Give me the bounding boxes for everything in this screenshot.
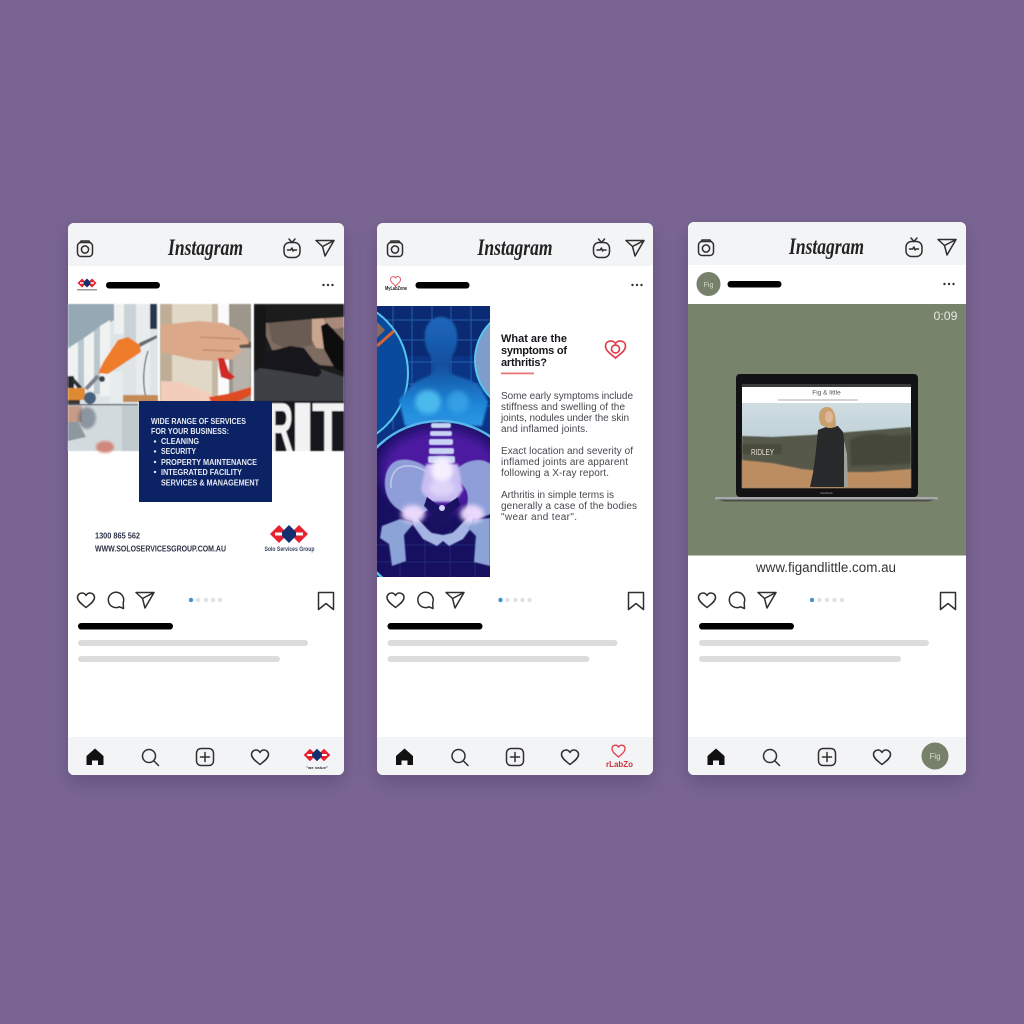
body text: generally a case of the bodies: [501, 501, 637, 512]
photo: security guard with jacket lettering: I: [288, 387, 317, 466]
profile row: [696, 272, 955, 296]
header icons and logo: Instagram: [477, 235, 552, 260]
body text: Arthritis in simple terms is: [501, 490, 614, 501]
action row: [387, 592, 644, 610]
panel: phone 1 solo services group post: [68, 223, 379, 783]
video panel: [688, 304, 966, 556]
header icons and logo: [388, 235, 644, 260]
bottom navigation: "we value": [306, 765, 328, 770]
header icons and logo: Instagram: [788, 234, 864, 259]
body text: inflamed joints are apparent: [501, 457, 628, 468]
body text: Exact location and severity of: [501, 446, 633, 457]
bottom navigation: Fig: [929, 752, 941, 761]
bottom navigation: rLabZo: [606, 760, 633, 769]
heading: [501, 333, 567, 369]
photo: security guard with jacket lettering: Y: [344, 389, 379, 467]
body text: Some early symptoms include: [501, 391, 633, 402]
header icons and logo: [78, 235, 334, 260]
body text: following a X-ray report.: [501, 468, 609, 479]
callout: services box: WIDE RANGE OF SERVICES: [151, 417, 247, 426]
callout: services box: SECURITY: [161, 447, 197, 456]
bottom navigation: [708, 742, 948, 770]
panel: phone 2 arthritis post: [374, 223, 656, 786]
laptop mockup: [715, 374, 938, 502]
photo: x-ray body and pelvis: [377, 306, 490, 577]
contact details: 1300 865 562: [95, 532, 141, 540]
heading underline: [501, 372, 534, 374]
laptop mockup: Fig & little: [812, 390, 841, 396]
heading: What are the: [501, 333, 567, 345]
callout: services box: FOR YOUR BUSINESS:: [151, 427, 229, 436]
bottom navigation: [86, 748, 330, 770]
callout: services box: INTEGRATED FACILITY: [161, 468, 243, 477]
action row: [78, 592, 334, 610]
photo: security guard with jacket lettering: R: [268, 388, 293, 466]
profile row: [77, 278, 334, 290]
callout: services box: [139, 401, 272, 502]
photo: security guard with jacket lettering: T: [312, 389, 344, 467]
icon: heart: [606, 341, 626, 358]
photo: plumbing: [160, 304, 251, 402]
contact details: [95, 532, 226, 554]
website url: www.figandlittle.com.au: [755, 560, 896, 575]
caption placeholder bars: [699, 623, 929, 662]
caption placeholder bars: [388, 623, 618, 662]
logo: solo services group: [264, 525, 315, 553]
profile row: MyLabZone: [385, 286, 407, 292]
body text: joints, nodules under the skin: [500, 413, 629, 424]
laptop mockup: RIDLEY: [751, 448, 775, 457]
bottom navigation: [396, 745, 633, 769]
action row: [698, 592, 956, 610]
body text: and inflamed joints.: [501, 424, 588, 435]
heading: symptoms of: [501, 345, 567, 357]
callout: services box: PROPERTY MAINTENANCE: [161, 458, 258, 467]
panel: phone 3 fig and little post: [688, 222, 966, 783]
profile row: [385, 277, 643, 292]
body text: [500, 391, 637, 523]
callout: services box: SERVICES & MANAGEMENT: [161, 478, 259, 488]
body text: "wear and tear".: [501, 512, 577, 523]
video timestamp: 0:09: [934, 311, 958, 323]
body text: stiffness and swelling of the: [501, 402, 625, 413]
callout: services box: CLEANING: [161, 437, 199, 446]
photo: security guard with jacket lettering: [253, 303, 345, 452]
logo: solo services group: Solo Services Group: [264, 546, 315, 553]
profile row: Fig: [704, 282, 713, 289]
header icons and logo: [698, 234, 956, 259]
caption placeholder bars: [78, 623, 308, 662]
laptop mockup: MacBook: [820, 491, 833, 495]
header icons and logo: Instagram: [167, 235, 243, 260]
photo: cleaning machine: [68, 304, 158, 453]
contact details: WWW.SOLOSERVICESGROUP.COM.AU: [95, 544, 226, 554]
heading: arthritis?: [501, 357, 547, 369]
